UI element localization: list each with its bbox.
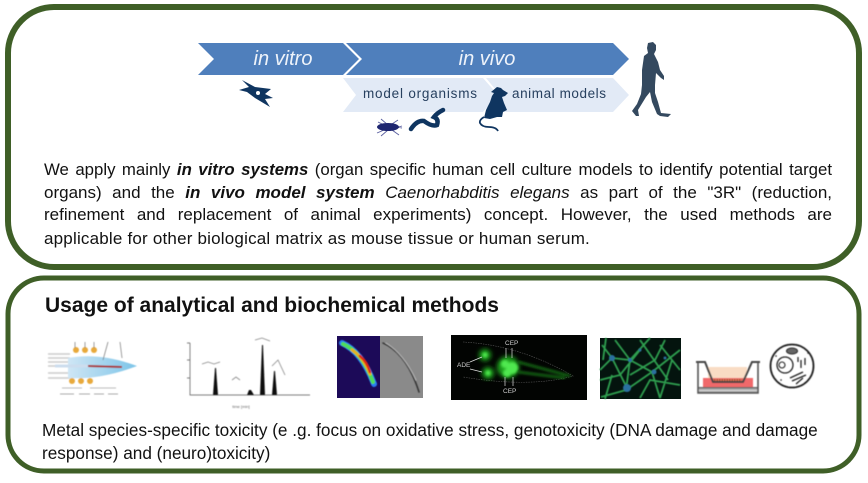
arrow: in vivo: [346, 43, 629, 75]
body text: toxicity: response) and (neuro)toxicity): [42, 443, 270, 463]
body text: model systems: refinement and replacement of animal experiments) concept. However, the used methods are: [44, 205, 832, 224]
arrow: in vivo: in vivo: [459, 48, 515, 70]
image: GFP neurons in C. elegans: ADE: [457, 362, 471, 369]
arrow: animal models: animal models: [512, 86, 606, 101]
image: chromatogram: [187, 338, 310, 409]
image: GFP neurons in C. elegans: CEP: [503, 388, 516, 395]
image: transwell insert: [696, 362, 760, 393]
image: elemental map of worm: [337, 336, 423, 398]
icon: mouse: [480, 87, 508, 131]
heading: analytical methods: Usage of analytical and biochemical methods: [45, 294, 499, 317]
body text: model systems: organs) and the in vivo model system Caenorhabditis elegans as part of the "3R" (reduction,: [44, 183, 832, 202]
body text: model systems: [44, 160, 832, 248]
body text: toxicity: Metal species-specific toxicity (e .g. focus on oxidative stress, genotoxicity (DNA damage and damage: [42, 420, 818, 440]
image: chromatogram: time [min]: [232, 404, 250, 409]
image: mass spectrometry diagram: [48, 342, 137, 394]
arrow: in vitro: [198, 43, 359, 75]
images row: [48, 335, 814, 409]
arrow: animal models: [486, 78, 629, 112]
image: GFP neurons in C. elegans: [451, 335, 587, 400]
image: neuronal network: [600, 338, 681, 399]
arrow: model organisms: [343, 78, 498, 112]
icon: fly: [377, 119, 402, 136]
panel: analytical methods: [8, 278, 859, 471]
arrow: in vitro: in vitro: [254, 48, 312, 70]
image: GFP neurons in C. elegans: CEP: [505, 340, 518, 347]
icon: worm: [411, 110, 443, 129]
image: cell diagram: [770, 344, 814, 388]
icon: cell: [239, 80, 273, 107]
panel: model systems: [8, 7, 859, 267]
body text: model systems: We apply mainly in vitro systems (organ specific human cell culture models to identify potential target: [44, 160, 832, 179]
icon: human: [632, 42, 671, 117]
arrow: model organisms: model organisms: [363, 86, 477, 101]
body text: toxicity: [42, 420, 818, 463]
body text: model systems: applicable for other biological matrix as mouse tissue or human serum.: [44, 229, 590, 248]
